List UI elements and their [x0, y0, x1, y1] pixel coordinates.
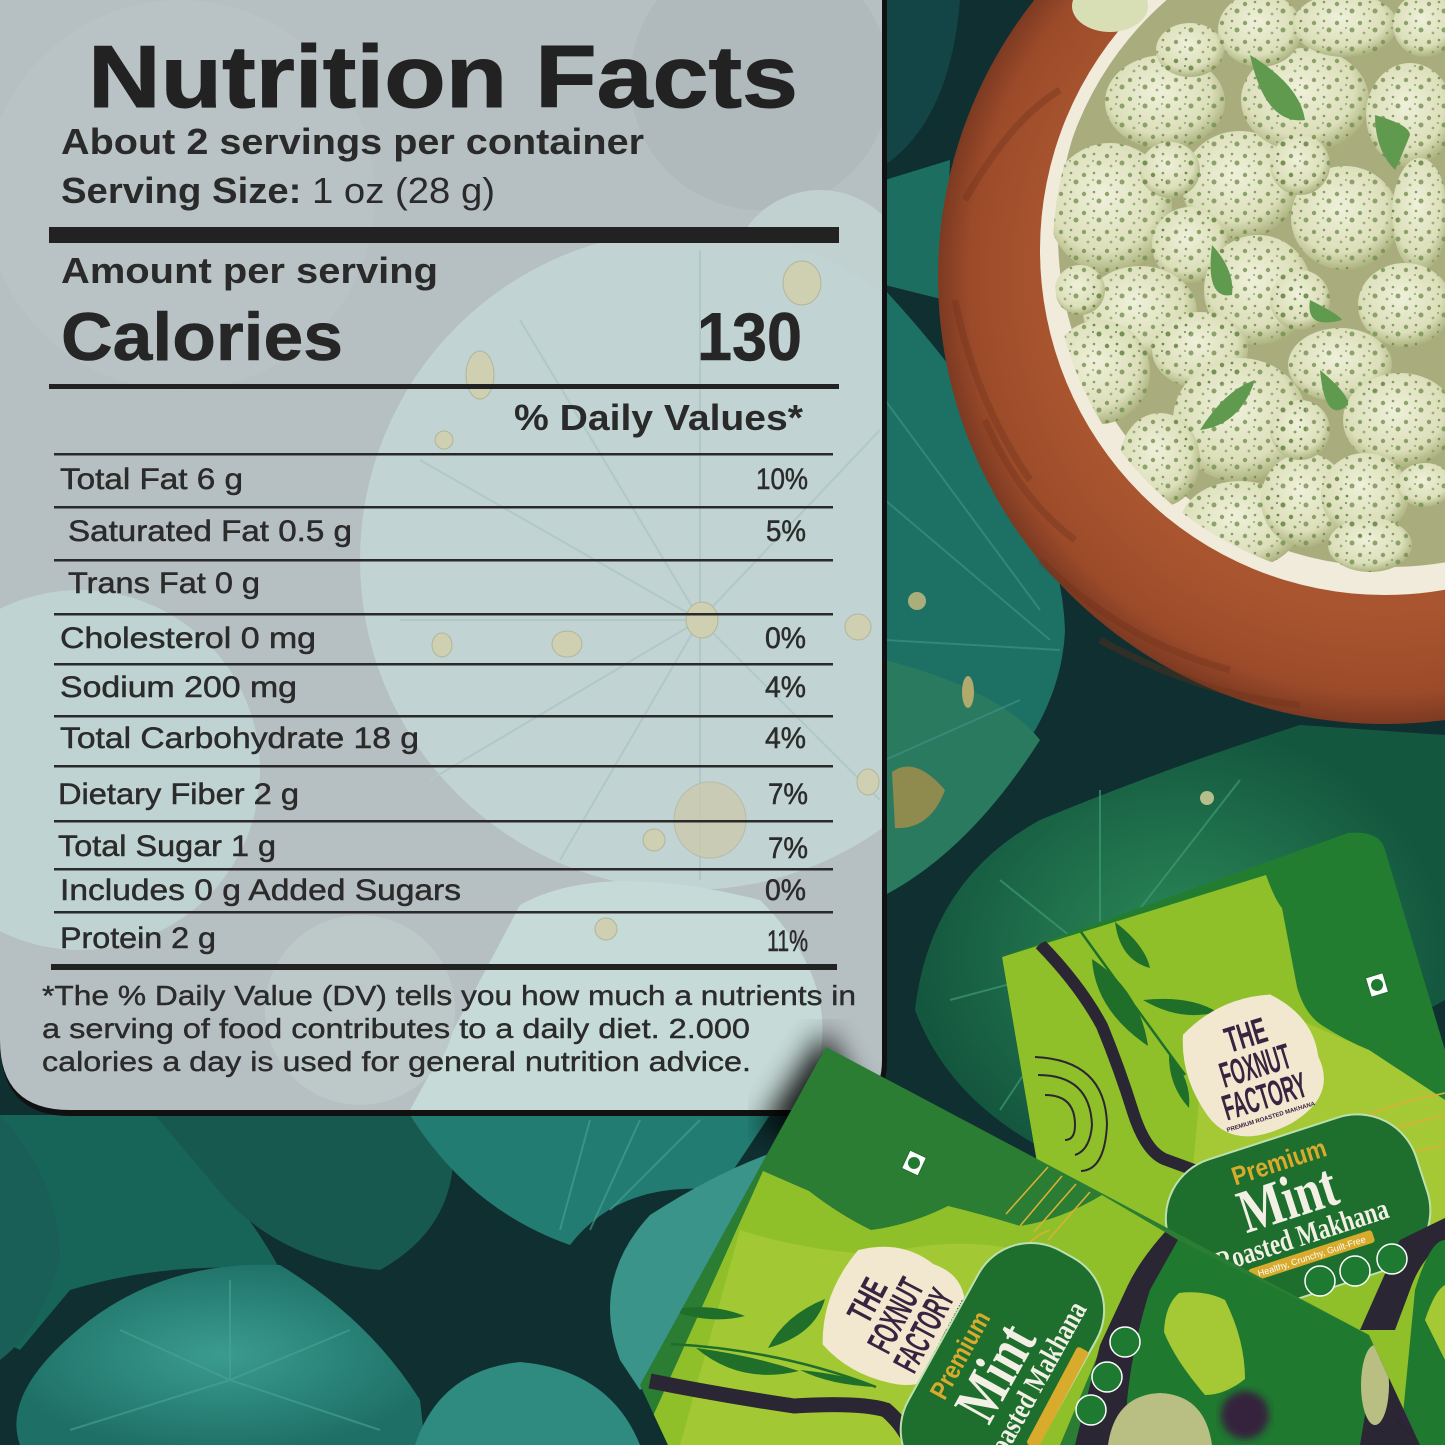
daily values heading: % Daily Values* — [514, 397, 803, 438]
row: protein — [60, 922, 808, 958]
row: total sugar: 7% — [768, 832, 808, 865]
row: cholesterol — [60, 622, 806, 655]
packet side makhana — [1361, 1345, 1389, 1425]
logo: front packet: FACTORY — [885, 1282, 962, 1379]
row: total fat: Total Fat 6 g — [60, 463, 243, 496]
logo: front packet: PREMIUM ROASTED MAKHANA — [919, 1298, 968, 1383]
shadow under front packet — [760, 1030, 880, 1140]
row: total fat: 10% — [756, 463, 808, 496]
row: sodium: Sodium 200 mg — [60, 671, 297, 704]
serving size: Serving Size: 1 oz (28 g) — [61, 170, 495, 211]
calories label: Calories — [61, 299, 343, 375]
footnote: *The % Daily Value (DV) tells you how much a nutrients in — [42, 980, 856, 1011]
label pill: back packet: Roasted Makhana — [1211, 1192, 1393, 1279]
divider — [49, 384, 839, 389]
label pill: back packet — [1164, 1113, 1432, 1299]
row: total carbohydrate — [60, 722, 806, 755]
label strip: front packet — [1026, 1346, 1089, 1445]
row: total fat — [60, 463, 808, 496]
icon: FSSAI mark, front packet — [902, 1150, 926, 1176]
servings per container: About 2 servings per container — [61, 121, 644, 162]
logo: back packet: THE — [1220, 1009, 1272, 1061]
footnote — [42, 980, 856, 1077]
amount per serving: Amount per serving — [61, 250, 438, 291]
row: added sugars: Includes 0 g Added Sugars — [60, 874, 461, 907]
row: total sugar: Total Sugar 1 g — [58, 830, 276, 863]
logo: back packet: FACTORY — [1217, 1064, 1312, 1128]
logo: back packet — [1182, 994, 1324, 1136]
row: trans fat: Trans Fat 0 g — [68, 567, 260, 600]
plate and bowl of mint makhana — [938, 0, 1445, 724]
nutrition panel background — [0, 0, 887, 1116]
logo: front packet: THE — [839, 1271, 896, 1329]
footnote: a serving of food contributes to a daily diet. 2.000 — [42, 1013, 750, 1044]
icons: back packet claims — [1305, 1244, 1407, 1296]
row: added sugars: 0% — [765, 874, 806, 907]
row: protein: Protein 2 g — [60, 922, 216, 955]
label pill: front packet — [900, 1242, 1106, 1445]
footnote: calories a day is used for general nutrition advice. — [42, 1046, 751, 1077]
logo: front packet — [822, 1246, 964, 1385]
logo: front packet: FOXNUT — [859, 1271, 932, 1359]
icons: front packet claims — [1076, 1327, 1140, 1425]
label pill: back packet: Premium — [1228, 1132, 1330, 1191]
dark shadow blobs — [1216, 1386, 1413, 1444]
thick divider — [49, 227, 839, 243]
front packet — [630, 1040, 1445, 1445]
logo: back packet: FOXNUT — [1215, 1035, 1296, 1096]
row: saturated fat: Saturated Fat 0.5 g — [68, 515, 352, 548]
row: dietary fiber: Dietary Fiber 2 g — [58, 778, 299, 811]
label pill: back packet: Healthy, Crunchy, Guilt-Free — [1257, 1234, 1367, 1279]
row: dietary fiber: 7% — [768, 778, 808, 811]
row: cholesterol: Cholesterol 0 mg — [60, 622, 316, 655]
row: sodium — [60, 671, 806, 704]
row: total carbohydrate: Total Carbohydrate 18 g — [60, 722, 419, 755]
row: total sugar — [58, 830, 808, 865]
title: Nutrition Facts — [88, 27, 798, 126]
row: sodium: 4% — [765, 671, 806, 704]
row: total carbohydrate: 4% — [765, 722, 806, 755]
nutrient table — [54, 453, 833, 958]
logo: back packet: PREMIUM ROASTED MAKHANA — [1226, 1101, 1317, 1134]
label pill: back packet: Mint — [1230, 1151, 1346, 1247]
row: saturated fat: 5% — [766, 515, 806, 548]
back packet — [1000, 830, 1445, 1445]
row: saturated fat — [68, 515, 806, 548]
row: dietary fiber — [58, 778, 808, 811]
label pill: front packet: Premium — [923, 1306, 996, 1404]
row: protein: 11% — [767, 925, 808, 958]
makhana window on front packet — [1108, 1393, 1212, 1445]
row: added sugars — [60, 874, 806, 907]
row: cholesterol: 0% — [765, 622, 806, 655]
thick table end rule — [51, 964, 837, 970]
label pill: front packet: Mint — [942, 1312, 1050, 1433]
icon: FSSAI mark, back packet — [1365, 973, 1389, 997]
calories value: 130 — [697, 299, 802, 375]
